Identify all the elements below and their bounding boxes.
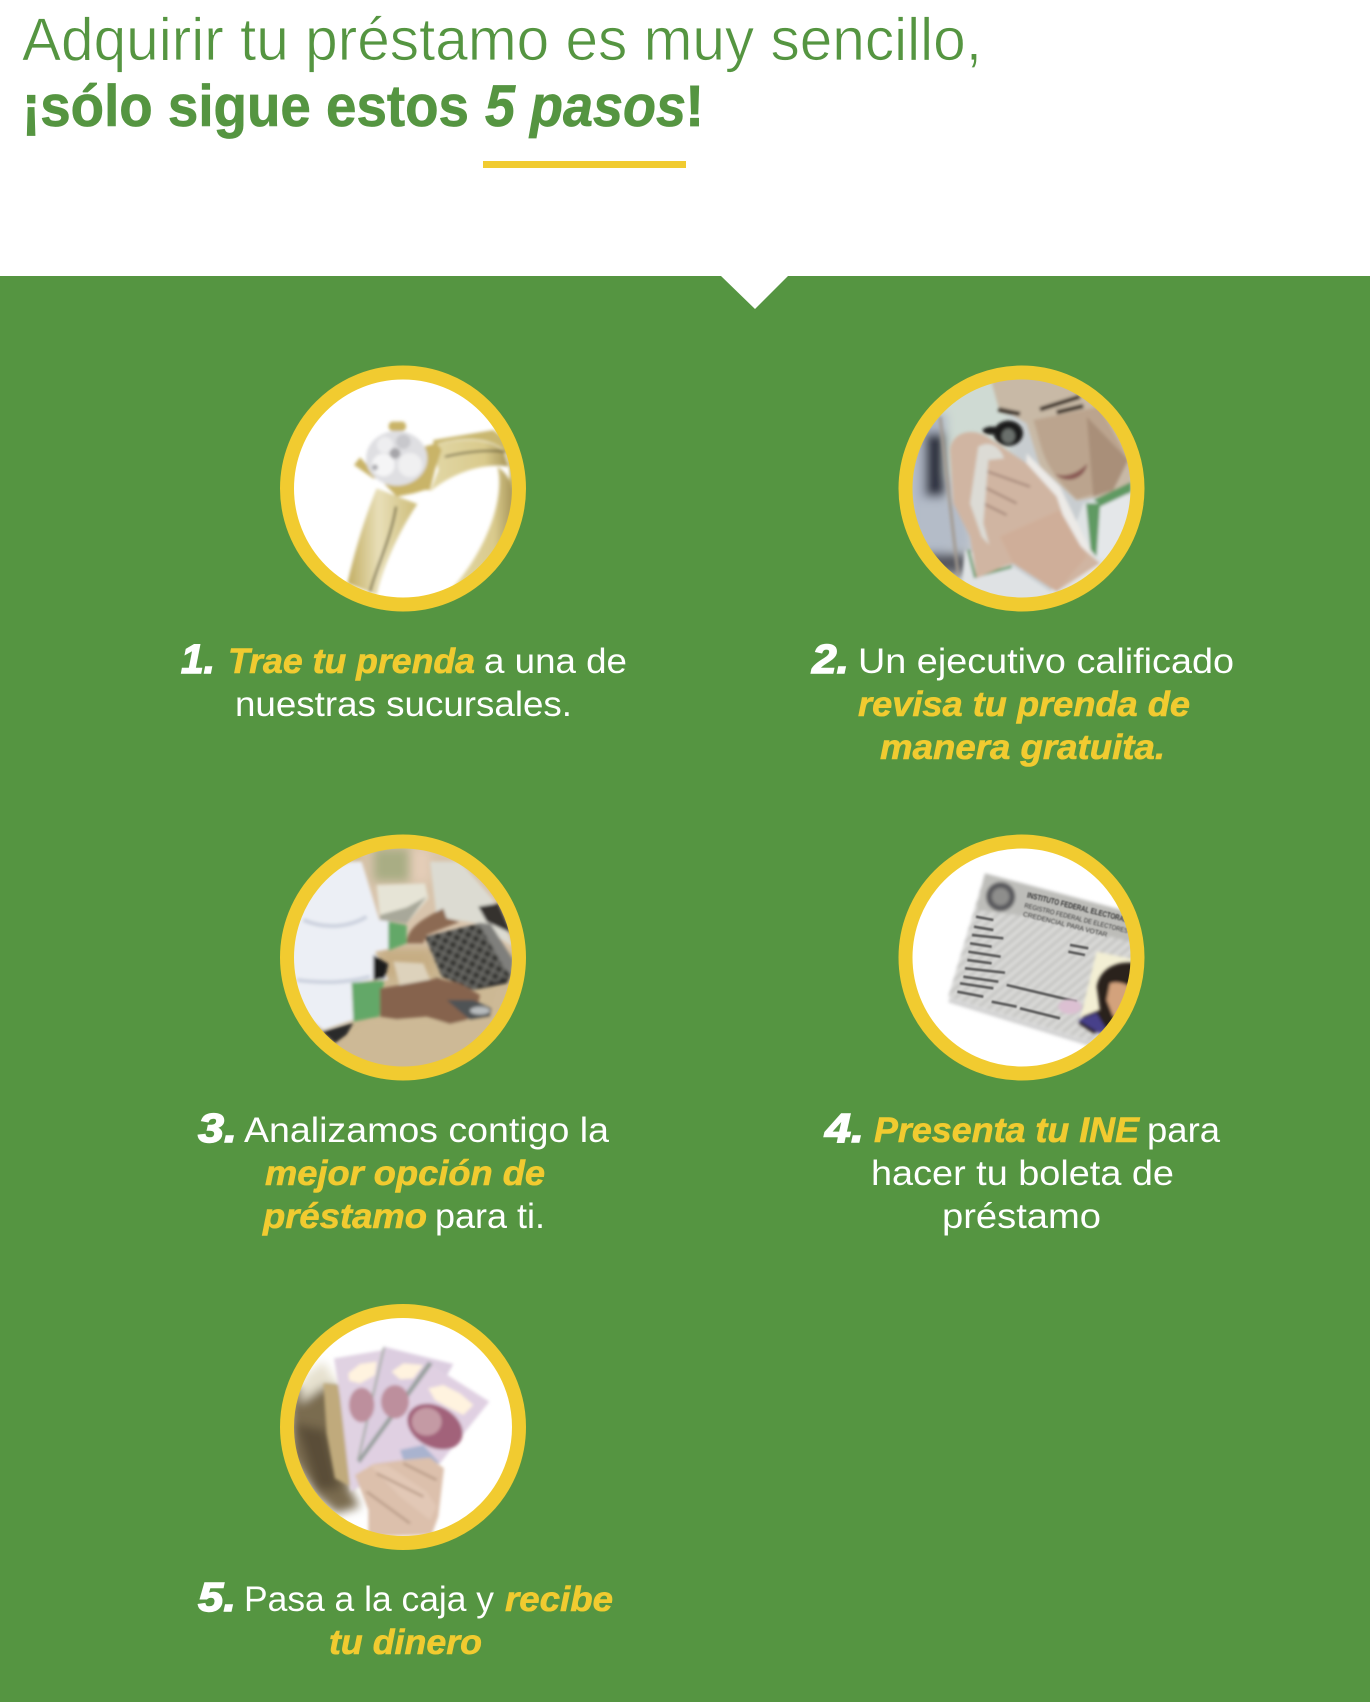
step 3 text: mejor opción de	[265, 1154, 545, 1193]
step 5 text: tu dinero	[329, 1623, 482, 1662]
icon: INE card photo	[912, 848, 1147, 1068]
yellow ring	[287, 372, 519, 604]
title: Adquirir tu préstamo es muy sencillo,	[22, 6, 982, 73]
step 3 text: Analizamos contigo la	[244, 1111, 610, 1150]
step 3 text: préstamo	[262, 1197, 427, 1236]
icon: jeweller with loupe photo	[910, 377, 1137, 607]
step 5 text: Pasa a la caja y	[244, 1580, 494, 1619]
title: 5 pasos	[485, 74, 686, 139]
title underline	[483, 161, 686, 168]
step 4 text: 4.	[824, 1105, 864, 1151]
step 4 panel	[824, 842, 1221, 1236]
step 3 text	[198, 1105, 610, 1236]
icon: INE card photo: CREDENCIAL PARA VOTAR	[1022, 911, 1108, 939]
step 1 text: Trae tu prenda	[228, 642, 475, 681]
step 2 text: manera gratuita.	[880, 728, 1165, 767]
step 2 panel	[811, 372, 1234, 767]
step 1 text	[181, 636, 627, 724]
step 4 text: préstamo	[942, 1197, 1101, 1236]
step 4 text: para	[1147, 1111, 1221, 1150]
step 4 text: hacer tu boleta de	[871, 1154, 1174, 1193]
yellow ring	[906, 372, 1138, 604]
yellow ring	[287, 842, 519, 1074]
yellow ring	[287, 1311, 519, 1543]
step 4 text: Presenta tu INE	[874, 1111, 1141, 1150]
step 2 text: Un ejecutivo calificado	[858, 642, 1234, 681]
yellow ring	[906, 842, 1138, 1074]
step 5 text: 5.	[198, 1574, 236, 1620]
step 4 text	[824, 1105, 1221, 1236]
icon: gold ring photo	[293, 378, 517, 598]
step 5 panel	[198, 1311, 613, 1662]
step 3 text: para ti.	[435, 1197, 545, 1236]
step 1 text: a una de	[484, 642, 627, 681]
step 1 text: 1.	[181, 636, 215, 682]
icon: hands on keyboard photo	[290, 843, 517, 1073]
step 2 text: 2.	[811, 636, 849, 682]
step 1 text: nuestras sucursales.	[235, 685, 572, 724]
step 5 text: recibe	[505, 1580, 613, 1619]
icon: INE card photo: REGISTRO FEDERAL DE ELECTORES	[1024, 902, 1129, 935]
title	[22, 6, 982, 139]
title: ¡sólo sigue estos	[22, 74, 469, 139]
step 3 panel	[198, 842, 610, 1236]
icon: hand holding banknotes photo	[290, 1317, 513, 1537]
step 2 text	[811, 636, 1234, 767]
icon: INE card photo: INSTITUTO FEDERAL ELECTORAL	[1026, 891, 1129, 924]
title: !	[685, 74, 704, 139]
step 3 text: 3.	[198, 1105, 237, 1151]
step 2 text: revisa tu prenda de	[858, 685, 1190, 724]
step 5 text	[198, 1574, 613, 1662]
step 1 panel	[181, 372, 627, 724]
